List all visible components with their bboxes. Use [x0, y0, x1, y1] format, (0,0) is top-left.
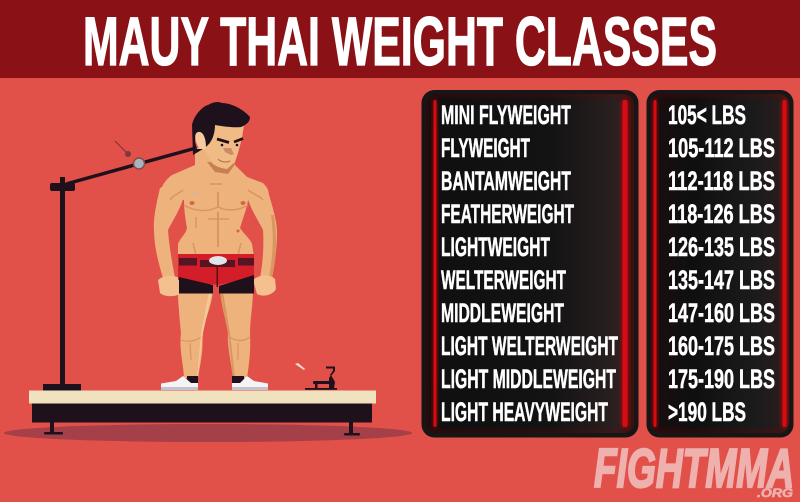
- legs: [178, 290, 253, 378]
- boxer figure: [154, 102, 277, 390]
- shorts: [178, 254, 254, 294]
- class names: FLYWEIGHT: [441, 133, 530, 163]
- title banner: [0, 0, 800, 80]
- ranges: [668, 100, 775, 427]
- illustration: man on a weighing scale: [4, 102, 412, 442]
- shoes: [161, 376, 268, 390]
- torso: [160, 148, 269, 256]
- panel: weight ranges: [646, 90, 794, 438]
- class names: WELTERWEIGHT: [441, 265, 566, 295]
- class names: BANTAMWEIGHT: [441, 166, 571, 196]
- scale pole and arm: [43, 141, 196, 390]
- class names: MIDDLEWEIGHT: [441, 298, 564, 328]
- muscle shading: [170, 184, 263, 255]
- head: [192, 102, 250, 174]
- scale shadow: [4, 424, 412, 442]
- class names: LIGHTWEIGHT: [441, 232, 550, 262]
- hands: [158, 275, 276, 296]
- class names: FEATHERWEIGHT: [441, 199, 574, 229]
- class names: LIGHT MIDDLEWEIGHT: [441, 364, 616, 394]
- ranges: 105< LBS: [668, 100, 746, 130]
- scale platform: [29, 390, 376, 436]
- class names: LIGHT WELTERWEIGHT: [441, 331, 618, 361]
- chest details: [190, 191, 246, 232]
- small lever on the scale: [295, 363, 337, 390]
- arms: [154, 180, 277, 278]
- ranges: >190 LBS: [668, 397, 746, 427]
- class names: LIGHT HEAVYWEIGHT: [441, 397, 608, 427]
- class names: MINI FLYWEIGHT: [441, 100, 571, 130]
- panel: weight class names: [422, 90, 638, 438]
- logo: FightMMA.org: .ORG: [757, 486, 793, 500]
- class names: [441, 100, 618, 427]
